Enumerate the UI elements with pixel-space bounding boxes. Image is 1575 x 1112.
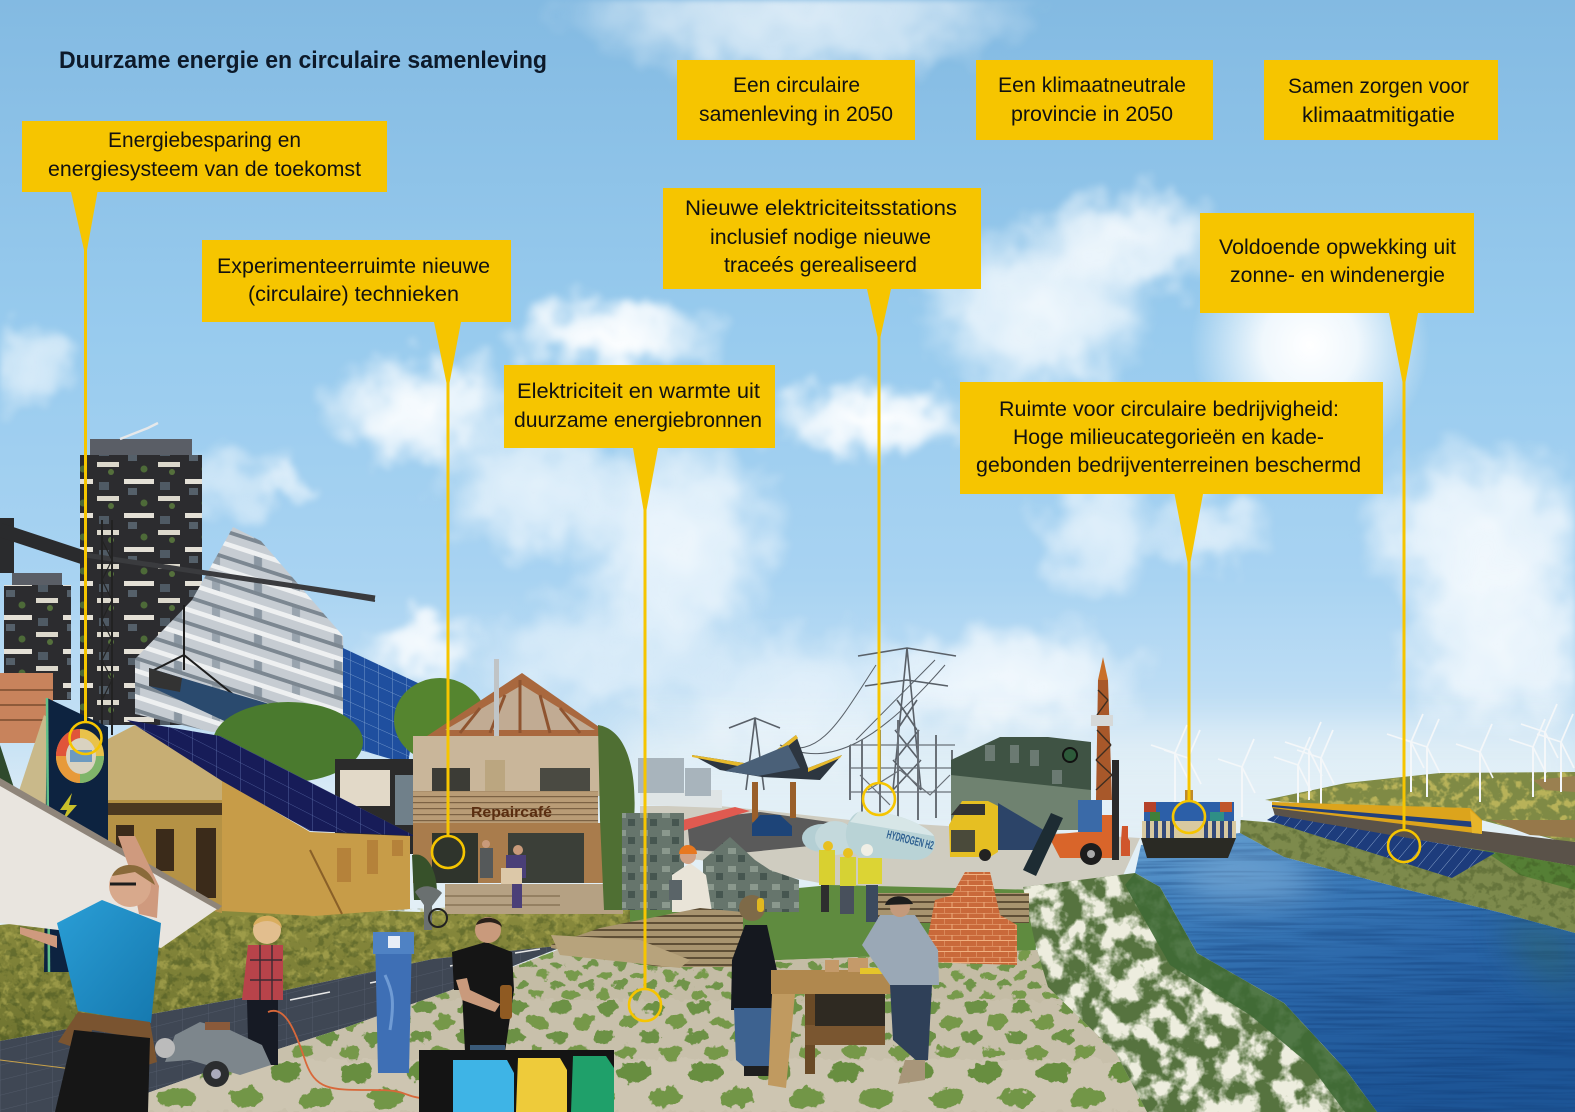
callout: Elektriciteit: duurzame energiebronnen [514,409,762,432]
flower bank [1020,870,1380,1112]
tank label: HYDROGEN H2 [885,827,935,853]
far person on quay [1121,826,1130,856]
engineer with hard hat [669,845,712,912]
callout: Experimenteerruimte: Experimenteerruimte nieuwe [217,255,490,278]
grass paver area [148,950,1147,1112]
road with solar tiles [0,945,567,1112]
canal water [1130,830,1575,1112]
clouds [0,0,1575,780]
plastic bales [622,813,799,912]
distant city [638,758,711,796]
callout: Nieuwe elektriciteitsstations: traceés gerealiseerd [724,254,917,277]
energy pillar with gauge [44,698,108,972]
callout: Energiebesparing: energiesysteem van de toekomst [48,158,361,181]
callout: Elektriciteit [504,365,775,1021]
callout: Ruimte voor circulaire bedrijvigheid: Ruimte voor circulaire bedrijvigheid: [999,398,1339,421]
lightning bolt [60,793,77,822]
callout: Een klimaatneutrale provincie: provincie in 2050 [1011,103,1173,126]
callout: Een circulaire samenleving [677,60,915,140]
drilling rig [1091,657,1113,800]
callout: Voldoende opwekking [1200,213,1474,862]
tall residential towers [4,423,202,725]
recycling bins [419,1050,614,1112]
horizon haze [620,720,1575,810]
workbench [768,958,891,1088]
title: Duurzame energie en circulaire samenleving [59,47,547,74]
callout: Nieuwe elektriciteitsstations: inclusief nodige nieuwe [710,226,931,249]
man sorting waste [452,917,514,1056]
angular white apartment block [135,527,345,732]
green central lawn [620,885,1040,968]
blue office building [343,648,420,764]
white board [0,782,220,948]
callout: Ruimte voor circulaire bedrijvigheid [960,382,1383,833]
solar roof [127,720,415,836]
callout: Een circulaire samenleving: Een circulaire [733,74,860,97]
bike charging post [373,932,414,1073]
railway track [1272,806,1575,866]
right canal bank [1240,820,1575,933]
brick apartments [0,673,53,743]
suspended solar roof panel [149,605,286,725]
left grass field [0,900,630,1041]
wind turbines [1151,704,1574,817]
yellow truck [949,801,1052,861]
sun glow [1190,225,1430,465]
repair cafe building [412,659,635,914]
repair cafe sign: Repaircafé [471,804,552,821]
tower crane [0,518,375,735]
callout: Ruimte voor circulaire bedrijvigheid: Hoge milieucategorieën en kade- [1013,426,1324,449]
woman at workbench [731,895,778,1076]
repair cafe visitors [415,840,526,930]
callout: Energiebesparing: Energiebesparing en [108,129,301,152]
workers in safety vests [819,841,882,922]
callout: Een klimaatneutrale provincie [976,60,1213,140]
callout: Nieuwe elektriciteitsstations: Nieuwe elektriciteitsstations [685,197,957,220]
green industrial building [951,737,1091,830]
wood frame house [16,715,415,916]
tool belt [58,1012,157,1070]
shirt [57,900,161,1023]
charging canopy [692,735,842,822]
child in plaid shirt [242,916,283,1065]
toy car with charging cable [155,1011,420,1098]
trees behind houses [0,678,486,860]
callout: Experimenteerruimte [202,240,511,868]
gauge dial [56,729,104,783]
solar field on bank [1267,815,1495,878]
callout: Een klimaatneutrale provincie: Een klimaatneutrale [998,74,1186,97]
timber stacks [551,893,1029,968]
man with cap at workbench [862,896,939,1084]
callout: Elektriciteit: Elektriciteit en warmte uit [517,380,760,403]
hydrogen tanks [802,811,935,860]
small modern house [335,759,416,854]
man carrying board [0,778,222,1112]
forklift [1023,760,1119,876]
cargo ship [1141,790,1236,858]
callout: Voldoende opwekking: Voldoende opwekking uit [1219,236,1456,259]
distant road and quay [640,790,1140,905]
brick pile [923,872,1017,965]
callout: Samen zorgen: Samen zorgen voor [1288,75,1469,98]
pylons and power lines [729,648,956,790]
callout: Samen zorgen [1264,60,1498,140]
callout: Nieuwe elektriciteitsstations [663,188,981,815]
callout: Voldoende opwekking: zonne- en windenergie [1230,264,1445,287]
callout: Energiebesparing [22,121,387,754]
electricity substation [850,720,955,820]
callout: Een circulaire samenleving: samenleving in 2050 [699,103,893,126]
trousers [55,1030,150,1112]
callout: Ruimte voor circulaire bedrijvigheid: gebonden bedrijventerreinen beschermd [976,454,1361,477]
distant hills [1265,772,1575,845]
blue car [752,815,792,836]
callout: Samen zorgen: klimaatmitigatie [1302,104,1455,127]
callout: Experimenteerruimte: (circulaire) technieken [248,283,459,306]
train [1272,802,1482,834]
